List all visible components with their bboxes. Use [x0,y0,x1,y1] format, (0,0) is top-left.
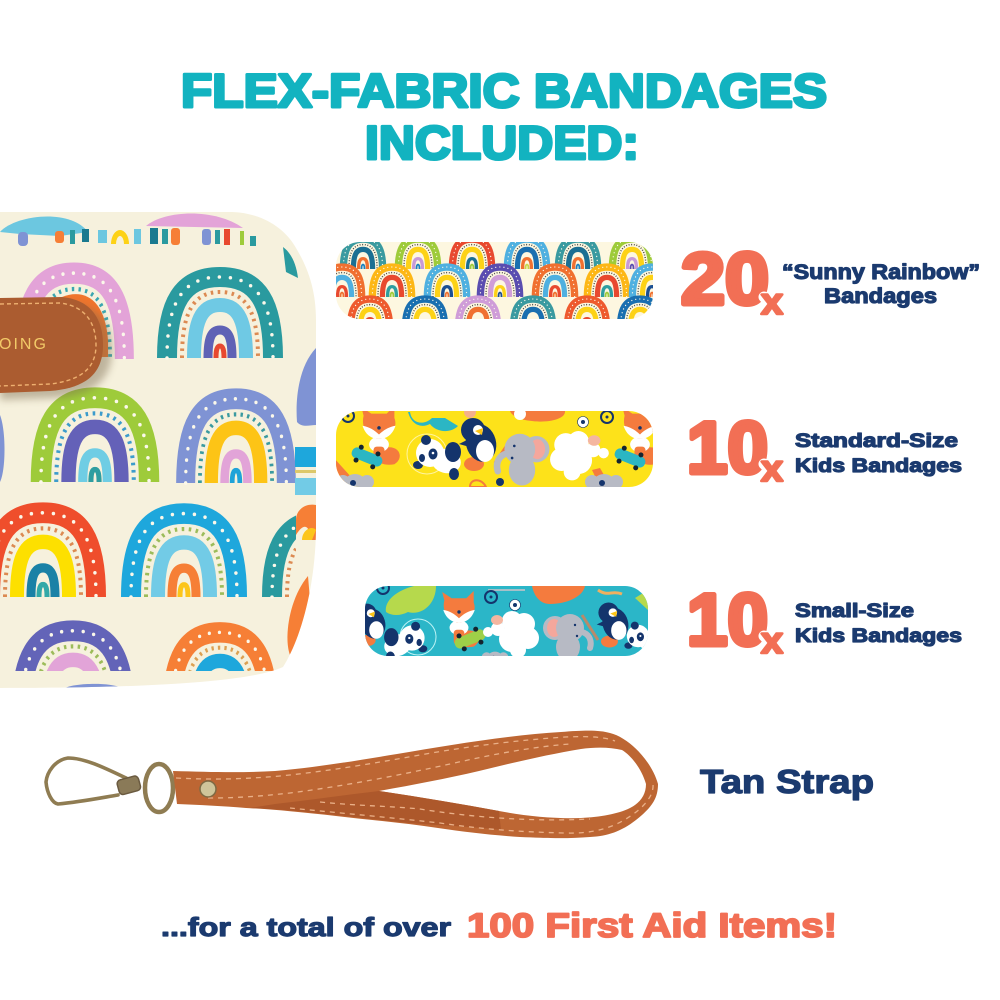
penguin right [597,602,632,648]
carabiner clip [46,758,173,812]
rainbow pattern row 2 [322,267,672,297]
background shapes [386,586,648,640]
top seam fragments [0,214,256,246]
panda right [624,622,648,649]
label: small-size kids bandages [795,600,962,647]
count: 20x: x [761,281,783,322]
panda with ring [407,434,464,480]
elephant [497,434,550,486]
fox, skateboard [352,411,400,470]
count: 10x small: 10 [687,580,768,661]
sheep [483,611,539,658]
label: tan strap: Tan Strap [700,763,874,800]
title: FLEX-FABRIC BANDAGES [181,64,827,117]
rainbow pattern row 3 [348,295,653,319]
sheep [550,431,609,480]
footer line: 100 First Aid Items! [467,907,837,945]
count: 10x standard: 10 [687,408,768,489]
title: INCLUDED: [365,116,639,169]
label: sunny rainbow bandages [782,261,980,308]
penguin [459,418,500,471]
strap leather [173,731,658,838]
rainbow pattern row 1 [343,239,652,269]
leather tab with stitching [0,297,112,400]
bandage: standard-size kids, yellow [336,411,653,487]
rainbow row 4 [15,620,274,671]
label: standard-size kids bandages [795,430,962,477]
count: 20x: 20 [681,239,769,320]
brand text on tab: OING [0,336,48,353]
panda with ring [384,618,436,656]
footer line [161,907,837,945]
label: small-size kids bandages: Kids Bandages [795,625,962,647]
count: 10x standard: x [761,448,783,489]
count: 10x small: x [761,620,783,661]
fox, skateboard right [614,411,653,470]
rivet [200,781,216,797]
label: sunny rainbow bandages: Bandages [824,285,937,308]
label: sunny rainbow bandages: “Sunny Rainbow” [782,261,980,284]
label: standard-size kids bandages: Kids Bandages [795,455,962,477]
stitching [176,737,653,833]
fox, skateboard [442,591,488,654]
rainbow row 2 [0,398,286,483]
orange band peeking behind tab [62,294,108,357]
penguin left [365,604,386,646]
footer line: ...for a total of over [161,912,451,942]
background shapes [334,406,608,487]
rainbow row 1 [24,273,273,359]
rainbow row 3 [0,502,296,598]
bandage: small-size kids, teal [365,586,648,656]
tan strap [46,731,658,838]
elephant [543,614,591,661]
side panel of pouch [283,247,316,655]
title [181,64,827,169]
label: small-size kids bandages: Small-Size [795,600,914,622]
label: standard-size kids bandages: Standard-Size [795,430,958,452]
bandage: sunny rainbow [336,242,653,319]
panel: rainbow first aid pouch [0,212,316,688]
